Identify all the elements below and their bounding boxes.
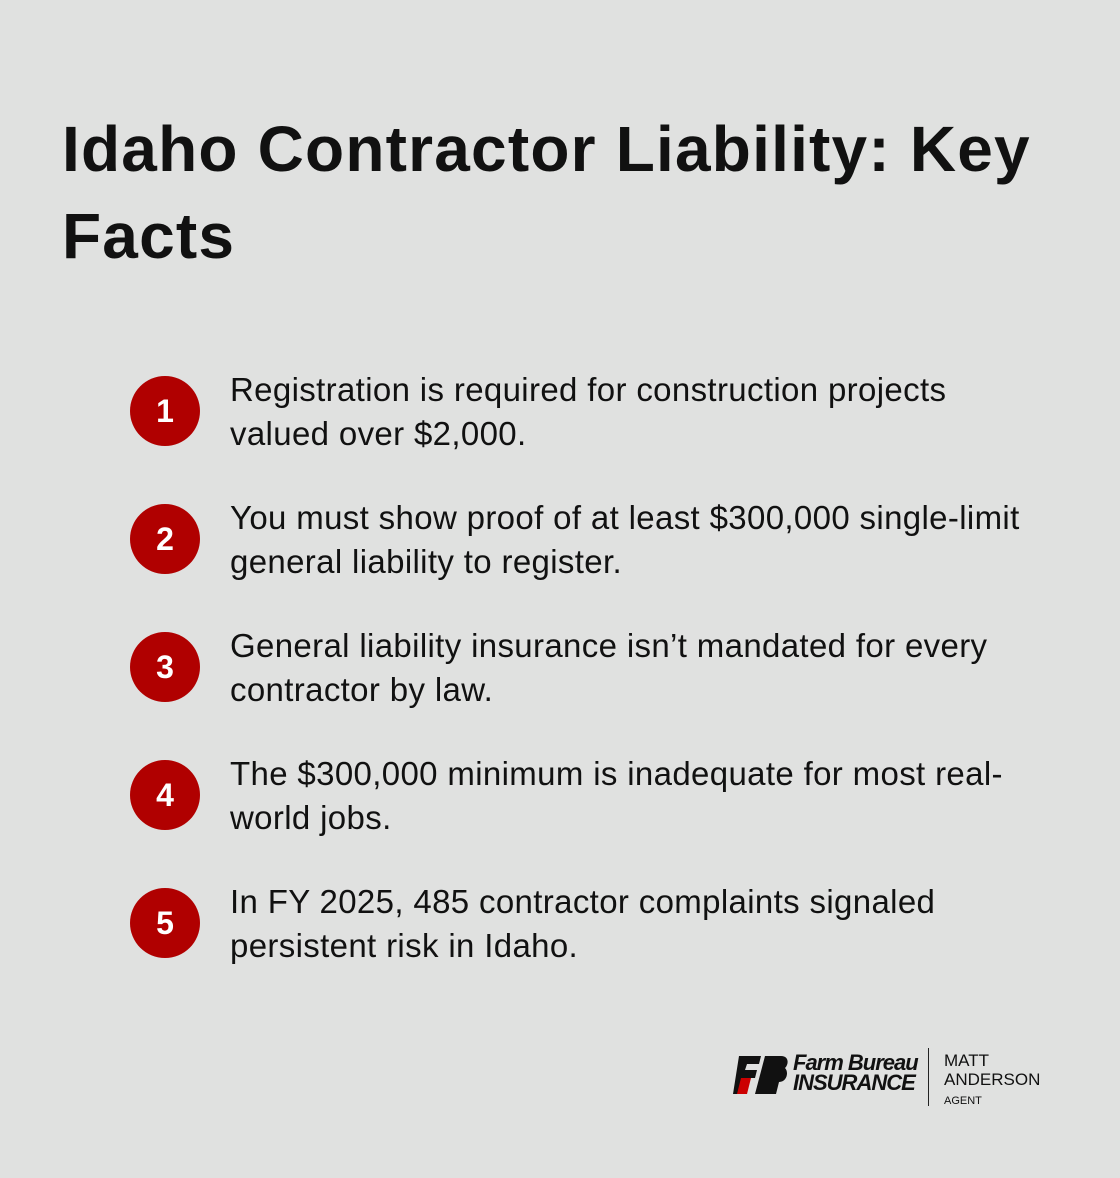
item 1: valued over $2,000. <box>230 415 527 452</box>
item 4: The $300,000 minimum is inadequate for most real- <box>230 755 1003 792</box>
agent name <box>944 1051 1040 1107</box>
agent name: ANDERSON <box>944 1070 1040 1089</box>
item 3: 3 <box>156 649 174 685</box>
item 5: In FY 2025, 485 contractor complaints signaled <box>230 883 935 920</box>
item 4: world jobs. <box>230 799 392 836</box>
item 1: 1 <box>156 393 174 429</box>
item 1: Registration is required for construction projects <box>230 371 946 408</box>
item 4: 4 <box>156 777 174 813</box>
item 5: 5 <box>156 905 174 941</box>
agent name: MATT <box>944 1051 989 1070</box>
item 1 <box>130 371 946 452</box>
item 2: You must show proof of at least $300,000 single-limit <box>230 499 1020 536</box>
agent name: AGENT <box>944 1095 982 1107</box>
brand name: Farm Bureau <box>793 1050 918 1075</box>
brand name: INSURANCE <box>793 1070 915 1095</box>
item 2: general liability to register. <box>230 543 622 580</box>
item 2: 2 <box>156 521 174 557</box>
item 3 <box>130 627 987 708</box>
item 4 <box>130 755 1003 836</box>
item 5 <box>130 883 935 964</box>
item 5: persistent risk in Idaho. <box>230 927 578 964</box>
title <box>62 113 1031 272</box>
title: Idaho Contractor Liability: Key <box>62 113 1031 185</box>
title: Facts <box>62 200 235 272</box>
logo <box>733 1048 1040 1107</box>
brand name <box>793 1050 918 1095</box>
item 3: contractor by law. <box>230 671 493 708</box>
icon: FB mark <box>733 1056 788 1094</box>
item 2 <box>130 499 1020 580</box>
item 3: General liability insurance isn’t mandated for every <box>230 627 987 664</box>
